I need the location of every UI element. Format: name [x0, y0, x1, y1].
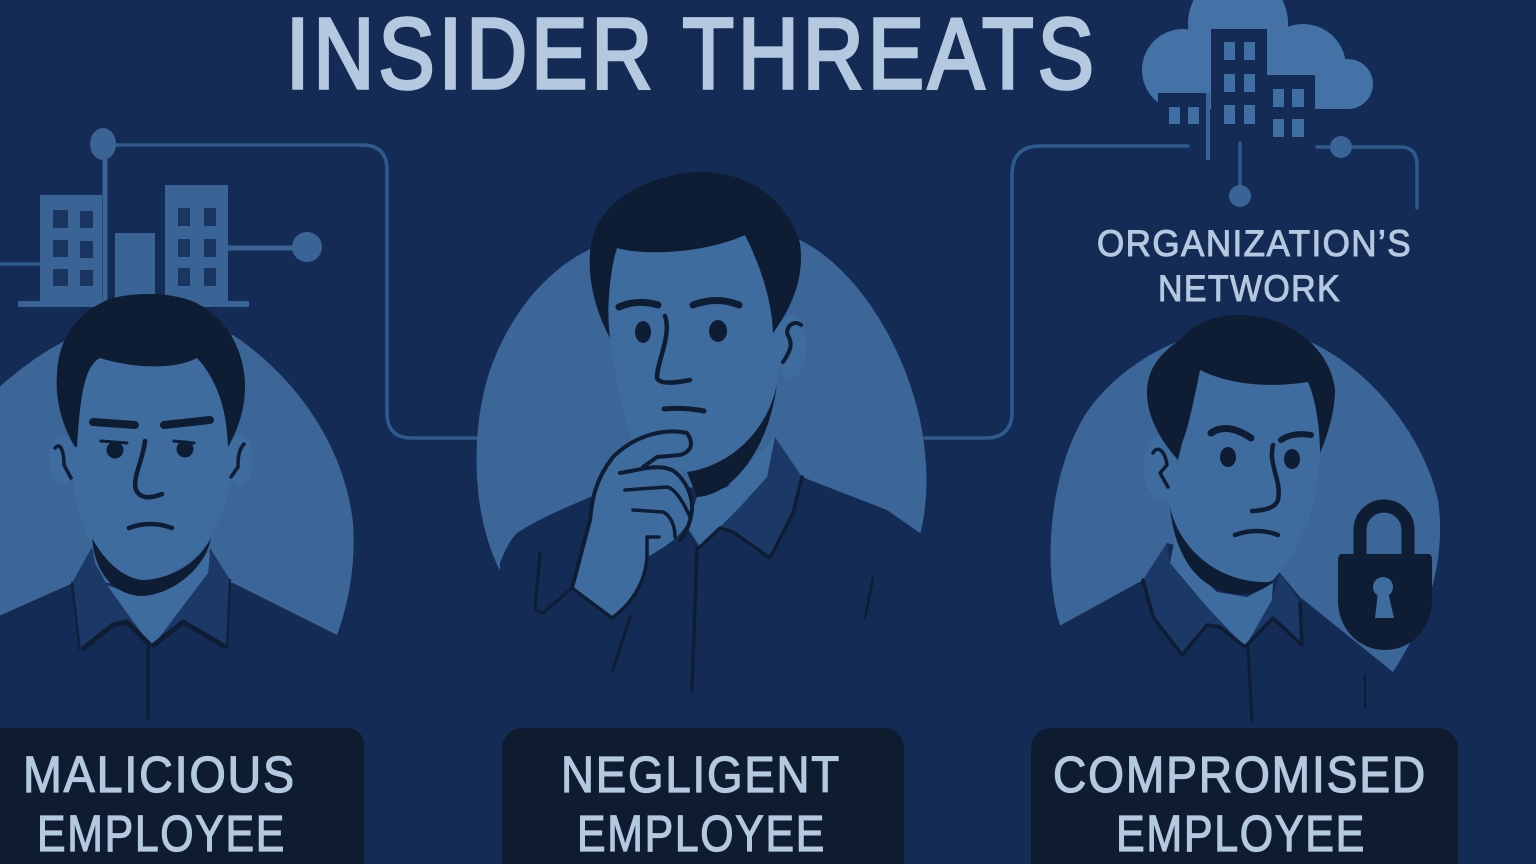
network label: [1097, 223, 1412, 309]
network line: left building to centre portrait: [90, 128, 485, 438]
icon: cloud with buildings: [1142, 0, 1417, 208]
icon: padlock: [1338, 506, 1432, 650]
portrait: malicious employee: [0, 294, 380, 725]
label: negligent employee: [502, 728, 904, 864]
label: malicious employee: MALICIOUS: [23, 746, 296, 803]
portrait: compromised employee: [1051, 315, 1440, 725]
label: negligent employee: NEGLIGENT: [561, 746, 841, 803]
label: compromised employee: EMPLOYEE: [1116, 805, 1366, 862]
label: negligent employee: EMPLOYEE: [577, 805, 826, 862]
network label: ORGANIZATION’S: [1097, 223, 1412, 264]
portrait: negligent employee: [476, 172, 926, 725]
network label: NETWORK: [1158, 268, 1341, 309]
label: compromised employee: [1031, 728, 1458, 864]
icon: office buildings with network nodes: [0, 150, 322, 307]
label: malicious employee: EMPLOYEE: [37, 805, 286, 862]
label: compromised employee: COMPROMISED: [1053, 746, 1427, 803]
network line: centre portrait to cloud: [925, 146, 1188, 438]
label: malicious employee: [0, 728, 364, 864]
title: INSIDER THREATS: [286, 0, 1098, 110]
